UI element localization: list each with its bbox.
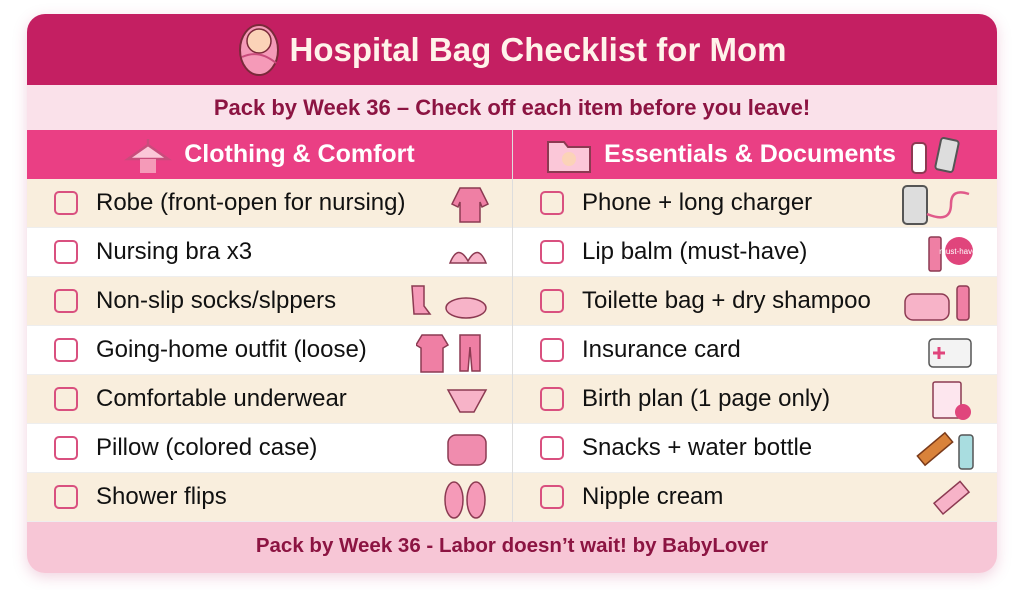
list: essentials: Phone + long charger xyxy=(582,189,812,216)
list: clothing: Robe (front-open for nursing) xyxy=(96,189,406,216)
header: essentials xyxy=(513,130,997,179)
list: essentials xyxy=(513,179,997,522)
header: clothing xyxy=(27,130,512,179)
footer xyxy=(27,522,997,573)
list: essentials: Birth plan (1 page only) xyxy=(582,385,830,412)
header: essentials: Essentials & Documents xyxy=(604,140,896,168)
list: clothing: Shower flips xyxy=(96,483,227,510)
title: Hospital Bag Checklist for Mom xyxy=(290,30,786,68)
icon: folder xyxy=(547,141,591,173)
list: clothing: Nursing bra x3 xyxy=(96,238,252,265)
subtitle: Pack by Week 36 – Check off each item before you leave! xyxy=(214,95,810,120)
list: essentials: Lip balm (must-have) xyxy=(582,238,807,265)
icon: hanger xyxy=(124,139,172,173)
icon: baby xyxy=(239,24,279,76)
divider xyxy=(512,130,513,522)
title xyxy=(27,14,997,85)
header: clothing: Clothing & Comfort xyxy=(184,140,415,168)
list: essentials: Snacks + water bottle xyxy=(582,434,812,461)
footer: Pack by Week 36 - Labor doesn’t wait! by BabyLover xyxy=(256,534,768,557)
list: essentials: Toilette bag + dry shampoo xyxy=(582,287,871,314)
list: clothing: Comfortable underwear xyxy=(96,385,347,412)
list: clothing: Going-home outfit (loose) xyxy=(96,336,367,363)
list: essentials: Insurance card xyxy=(582,336,741,363)
list: clothing xyxy=(27,179,512,522)
subtitle xyxy=(27,85,997,130)
list: essentials: Nipple cream xyxy=(582,483,723,510)
icon: bottle and phone xyxy=(911,137,960,174)
list: clothing: Non-slip socks/slppers xyxy=(96,287,336,314)
list: clothing: Pillow (colored case) xyxy=(96,434,317,461)
